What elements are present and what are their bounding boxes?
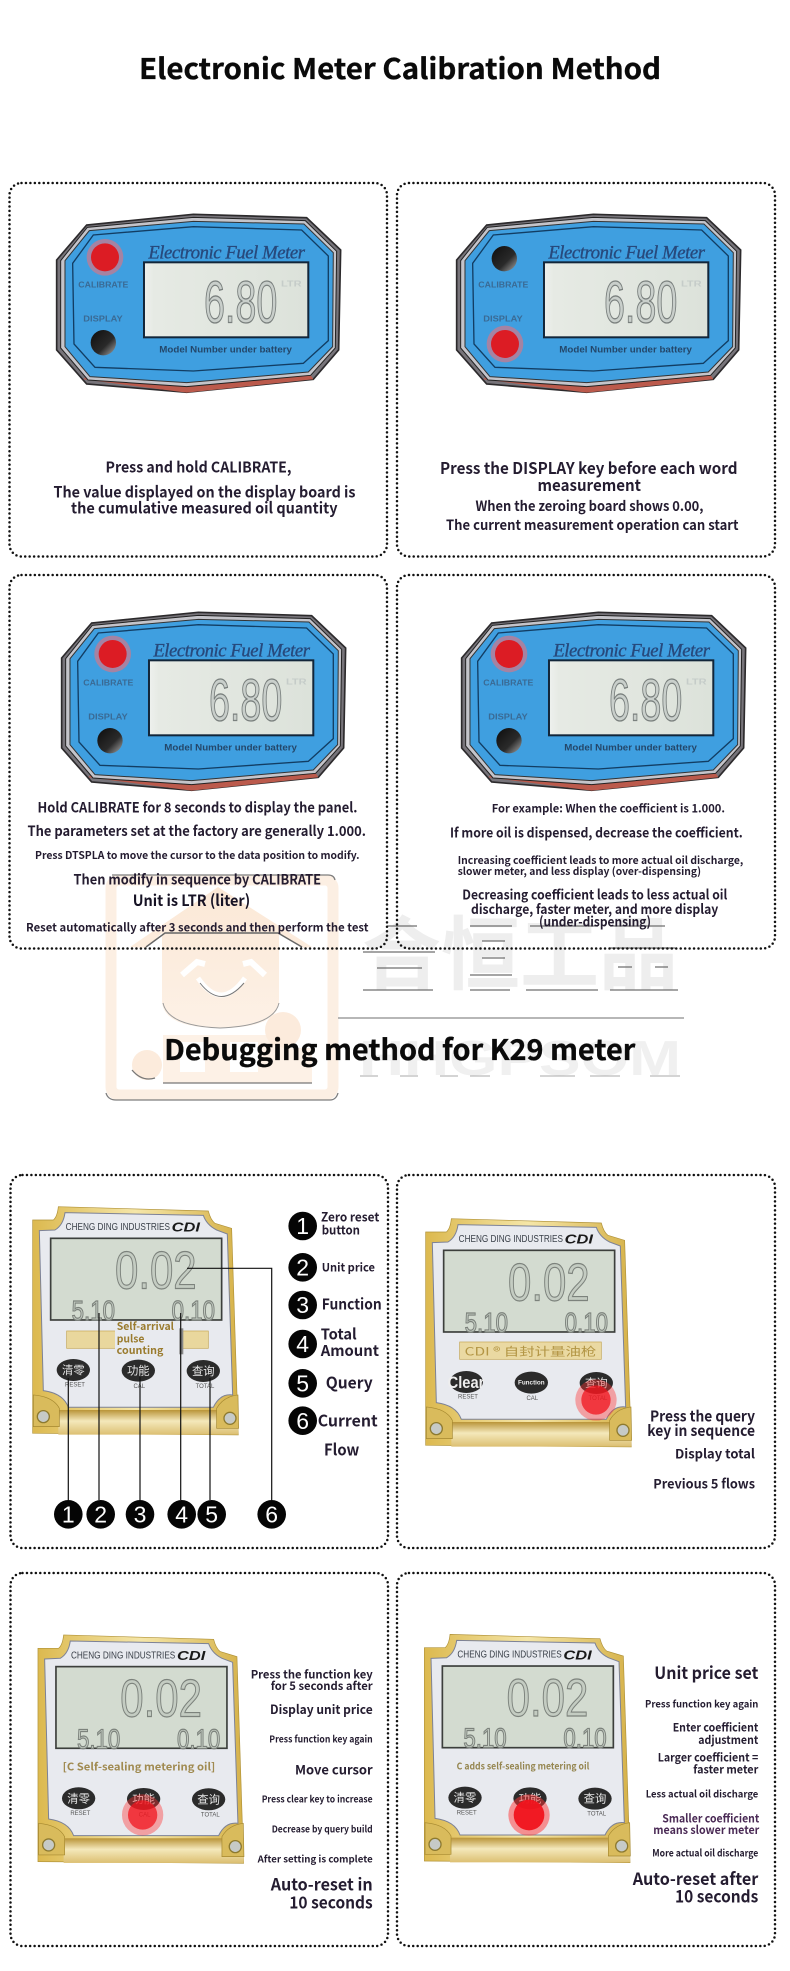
caption: (under-dispensing) [539,911,651,931]
icon: blue fuel meter, calibrate highlighted: Model Number under battery [564,743,697,753]
icon: blue fuel meter, calibrate highlighted: Model Number under battery [159,345,292,355]
icon: blue fuel meter, display highlighted: CALIBRATE [478,279,529,289]
icon: gold K29 meter: 清零 [62,1362,85,1378]
caption: the cumulative measured oil quantity [71,496,338,518]
icon: blue fuel meter, calibrate highlighted [62,612,346,791]
caption [647,1406,755,1492]
caption: Press the query [650,1406,755,1427]
caption: Display total [675,1444,755,1463]
legend: numbered key functions: Amount [320,1340,380,1361]
icon: gold meter with function key highlighted: CHENG DING INDUSTRIES [457,1650,562,1661]
icon: blue fuel meter, calibrate highlighted: 6.80 [609,667,682,734]
icon: gold K29 meter: 0.10 [172,1295,215,1326]
legend: numbered key functions [288,1207,382,1461]
caption: Press function key again [645,1695,758,1710]
callout lines and bottom numbers: 4 [175,1502,188,1528]
caption: After setting is complete [257,1852,373,1866]
icon: gold K29 meter: CAL [133,1384,146,1390]
caption: Smaller coefficient [662,1810,759,1826]
caption: Unit is LTR (liter) [133,889,250,911]
panel: K29 key map [10,1175,388,1548]
legend: numbered key functions: Flow [324,1437,359,1461]
caption [632,1659,760,1908]
icon: gold meter with total key highlighted: 0.10 [565,1307,608,1338]
icon: gold meter with function key highlighted: TOTAL [201,1812,220,1818]
icon: blue fuel meter, display highlighted: LTR [681,279,703,289]
icon: gold meter with total key highlighted: CHENG DING INDUSTRIES [459,1234,563,1245]
caption: measurement [538,472,641,496]
heading: debugging method: Debugging method for K29 meter [164,1028,636,1069]
icon: blue fuel meter, calibrate highlighted: LTR [286,677,308,687]
icon: blue fuel meter, calibrate highlighted: Model Number under battery [164,743,297,753]
icon: gold meter with function key highlighted: 0.02 [120,1670,202,1729]
icon: gold meter with function key highlighted: CHENG DING INDUSTRIES [71,1650,176,1661]
legend: numbered key functions: Function [322,1293,382,1314]
caption: When the zeroing board shows 0.00, [476,496,704,516]
panel: hold calibrate 8 seconds [10,575,387,948]
icon: blue fuel meter, calibrate highlighted: CALIBRATE [483,677,534,687]
icon: gold meter with function key highlighted: [C Self-sealing metering oil] [63,1759,215,1774]
icon: gold meter with function key highlighted: 0.10 [177,1723,220,1754]
icon: gold meter with total key highlighted: RESET [458,1395,478,1401]
icon: gold meter with function key highlighted: 5.10 [463,1723,507,1754]
icon: gold K29 meter: 0.02 [115,1241,197,1300]
overlay label: self-arrival pulse counting: Self-arrival [117,1319,175,1334]
caption: slower meter, and less display (over-dispensing) [458,864,701,879]
icon: gold meter with function key highlighted: 5.10 [77,1723,120,1754]
caption: Auto-reset in [270,1872,373,1896]
panel: press display key [397,183,775,556]
caption: Press DTSPLA to move the cursor to the data position to modify. [35,848,360,863]
icon: blue fuel meter, display highlighted: Electronic Fuel Meter [547,242,706,263]
legend: numbered key functions: Zero reset [321,1207,380,1226]
icon: gold meter with function key highlighted: 清零 [67,1790,90,1806]
icon: gold meter with total key highlighted: 0.02 [508,1253,590,1312]
legend: numbered key functions: 6 [296,1408,309,1434]
icon: gold meter with function key highlighted: 功能 [132,1791,155,1807]
icon: blue fuel meter, calibrate highlighted: DISPLAY [488,712,528,722]
icon: gold meter with function key highlighted: RESET [457,1810,477,1816]
icon: blue fuel meter, display highlighted: Model Number under battery [559,345,692,355]
callout lines and bottom numbers [54,1268,286,1529]
icon: blue fuel meter, calibrate highlighted: LTR [281,279,303,289]
caption [440,455,739,535]
icon: gold meter with function key highlighted: 清零 [454,1790,476,1806]
caption: Larger coefficient = [658,1750,758,1766]
legend: numbered key functions: 1 [296,1213,309,1239]
caption: adjustment [698,1732,758,1748]
caption: means slower meter [653,1822,760,1838]
legend: numbered key functions: 4 [296,1331,309,1357]
panel: coefficient example [397,575,775,948]
icon: gold K29 meter: 功能 [127,1363,150,1379]
icon: gold K29 meter: CHENG DING INDUSTRIES [66,1222,170,1233]
caption: Less actual oil discharge [646,1786,758,1801]
icon: gold K29 meter: 查询 [192,1363,215,1379]
icon: blue fuel meter, calibrate highlighted: Electronic Fuel Meter [552,640,711,661]
callout lines and bottom numbers: 3 [134,1502,146,1528]
icon: gold meter with function key highlighted [424,1634,630,1863]
icon: gold K29 meter: TOTAL [196,1384,215,1390]
caption: Then modify in sequence by CALIBRATE [74,869,321,889]
icon: gold K29 meter: CDI [172,1221,201,1235]
legend: numbered key functions: Unit price [322,1260,375,1276]
caption: If more oil is dispensed, decrease the coefficient. [450,822,743,842]
callout lines and bottom numbers: 1 [62,1502,75,1528]
icon: blue fuel meter, calibrate highlighted: DISPLAY [88,712,128,722]
legend: numbered key functions: 5 [296,1370,309,1396]
icon: gold meter with function key highlighted: 功能 [519,1790,541,1806]
callout lines and bottom numbers: 5 [205,1502,218,1528]
caption: Press function key again [269,1732,373,1746]
icon: gold K29 meter: RESET [65,1383,85,1389]
icon: blue fuel meter, calibrate highlighted: LTR [686,677,708,687]
legend: numbered key functions: 2 [296,1254,309,1280]
caption: Press clear key to increase [262,1792,373,1806]
caption: The current measurement operation can start [446,515,739,535]
icon: gold meter with total key highlighted: Clear [448,1373,485,1392]
legend: numbered key functions: Query [326,1369,373,1393]
caption: 10 seconds [675,1883,758,1908]
icon: blue fuel meter, display highlighted [457,214,741,393]
caption: More actual oil discharge [652,1845,758,1860]
icon: blue fuel meter, calibrate highlighted: 6.80 [204,269,277,336]
caption: Decreasing coefficient leads to less actual oil [462,883,727,903]
icon: gold meter with total key highlighted: Function [518,1380,545,1387]
icon: gold meter with total key highlighted [426,1219,632,1447]
panel: unit price set [397,1573,775,1946]
caption: for 5 seconds after [271,1678,374,1694]
icon: gold meter with function key highlighted: 查询 [584,1791,606,1807]
overlay label: self-arrival pulse counting: pulse [117,1332,144,1347]
caption: Move cursor [295,1759,373,1778]
caption [26,797,369,936]
icon: blue fuel meter, calibrate highlighted: 6.80 [209,667,282,734]
overlay label: self-arrival pulse counting: counting [117,1343,164,1358]
icon: gold meter with function key highlighted: CDI [177,1649,206,1663]
caption: The value displayed on the display board is [54,480,356,502]
caption: For example: When the coefficient is 1.000. [492,800,725,816]
caption [251,1666,374,1913]
legend: numbered key functions: Total [321,1323,357,1344]
icon: gold meter with function key highlighted: 0.02 [507,1669,588,1728]
icon: gold meter with function key highlighted: CDI [563,1648,592,1662]
icon: gold K29 meter: 5.10 [72,1295,115,1326]
caption [54,457,356,518]
caption: Press the function key [251,1666,373,1682]
caption: 10 seconds [289,1889,373,1913]
icon: gold meter with function key highlighted: CAL [139,1812,151,1818]
caption: Reset automatically after 3 seconds and then perform the test [26,920,369,936]
icon: gold meter with function key highlighted: RESET [70,1811,91,1817]
icon: gold meter with total key highlighted: CDI [565,1233,594,1247]
icon: blue fuel meter, calibrate highlighted [57,214,341,393]
caption: Increasing coefficient leads to more actual oil discharge, [458,853,743,868]
caption: Decrease by query build [272,1822,373,1836]
caption: Enter coefficient [673,1720,758,1736]
overlay label: self-arrival pulse counting [117,1319,175,1358]
icon: blue fuel meter, calibrate highlighted [462,612,746,791]
caption: faster meter [693,1761,759,1777]
title: Electronic Meter Calibration Method [139,47,661,88]
caption: key in sequence [647,1420,755,1441]
icon: blue fuel meter, calibrate highlighted: CALIBRATE [83,677,134,687]
icon: gold meter with total key highlighted: 查询 [585,1375,608,1391]
icon: gold meter with function key highlighted [38,1635,244,1863]
icon: blue fuel meter, calibrate highlighted: Electronic Fuel Meter [147,242,306,263]
legend: numbered key functions: Current [318,1408,378,1432]
icon: gold meter with function key highlighted: 0.10 [563,1723,607,1754]
watermark: brand logo: 合恒工品 [362,891,678,1007]
caption: Auto-reset after [632,1865,759,1890]
icon: gold meter with total key highlighted: CDI ® 自封计量油枪 [465,1343,596,1359]
icon: gold K29 meter [33,1207,239,1435]
legend: numbered key functions: 3 [296,1292,309,1318]
caption: discharge, faster meter, and more display [471,898,719,918]
legend: numbered key functions: button [322,1220,360,1239]
icon: blue fuel meter, display highlighted: DISPLAY [483,314,523,324]
panel: press the query key [397,1175,775,1548]
icon: gold meter with function key highlighted: 查询 [197,1791,220,1807]
icon: gold meter with total key highlighted: 5.10 [465,1307,508,1338]
panel: press and hold calibrate [10,183,387,556]
icon: gold meter with total key highlighted: TOTAL [589,1396,608,1402]
caption: Display unit price [270,1699,373,1718]
caption: Unit price set [654,1659,758,1684]
caption: Press and hold CALIBRATE, [106,457,292,478]
callout lines and bottom numbers: 6 [265,1502,278,1528]
caption: Previous 5 flows [653,1473,755,1492]
caption [450,800,743,931]
watermark: brand logo: HHGPSOM [359,1032,681,1086]
caption: Press the DISPLAY key before each word [440,455,738,479]
icon: blue fuel meter, calibrate highlighted: DISPLAY [83,314,123,324]
caption: Hold CALIBRATE for 8 seconds to display the panel. [38,797,358,817]
icon: blue fuel meter, calibrate highlighted: Electronic Fuel Meter [152,640,311,661]
icon: gold meter with function key highlighted: C adds self-sealing metering oil [457,1758,589,1772]
panel: press the function key [10,1573,388,1946]
icon: gold meter with total key highlighted: CAL [526,1396,539,1402]
icon: blue fuel meter, display highlighted: 6.80 [604,269,677,336]
icon: gold meter with function key highlighted: TOTAL [587,1812,607,1818]
callout lines and bottom numbers: 2 [94,1502,107,1528]
watermark: brand logo [106,875,684,1100]
caption: The parameters set at the factory are generally 1.000. [28,821,366,841]
icon: blue fuel meter, calibrate highlighted: CALIBRATE [78,279,129,289]
